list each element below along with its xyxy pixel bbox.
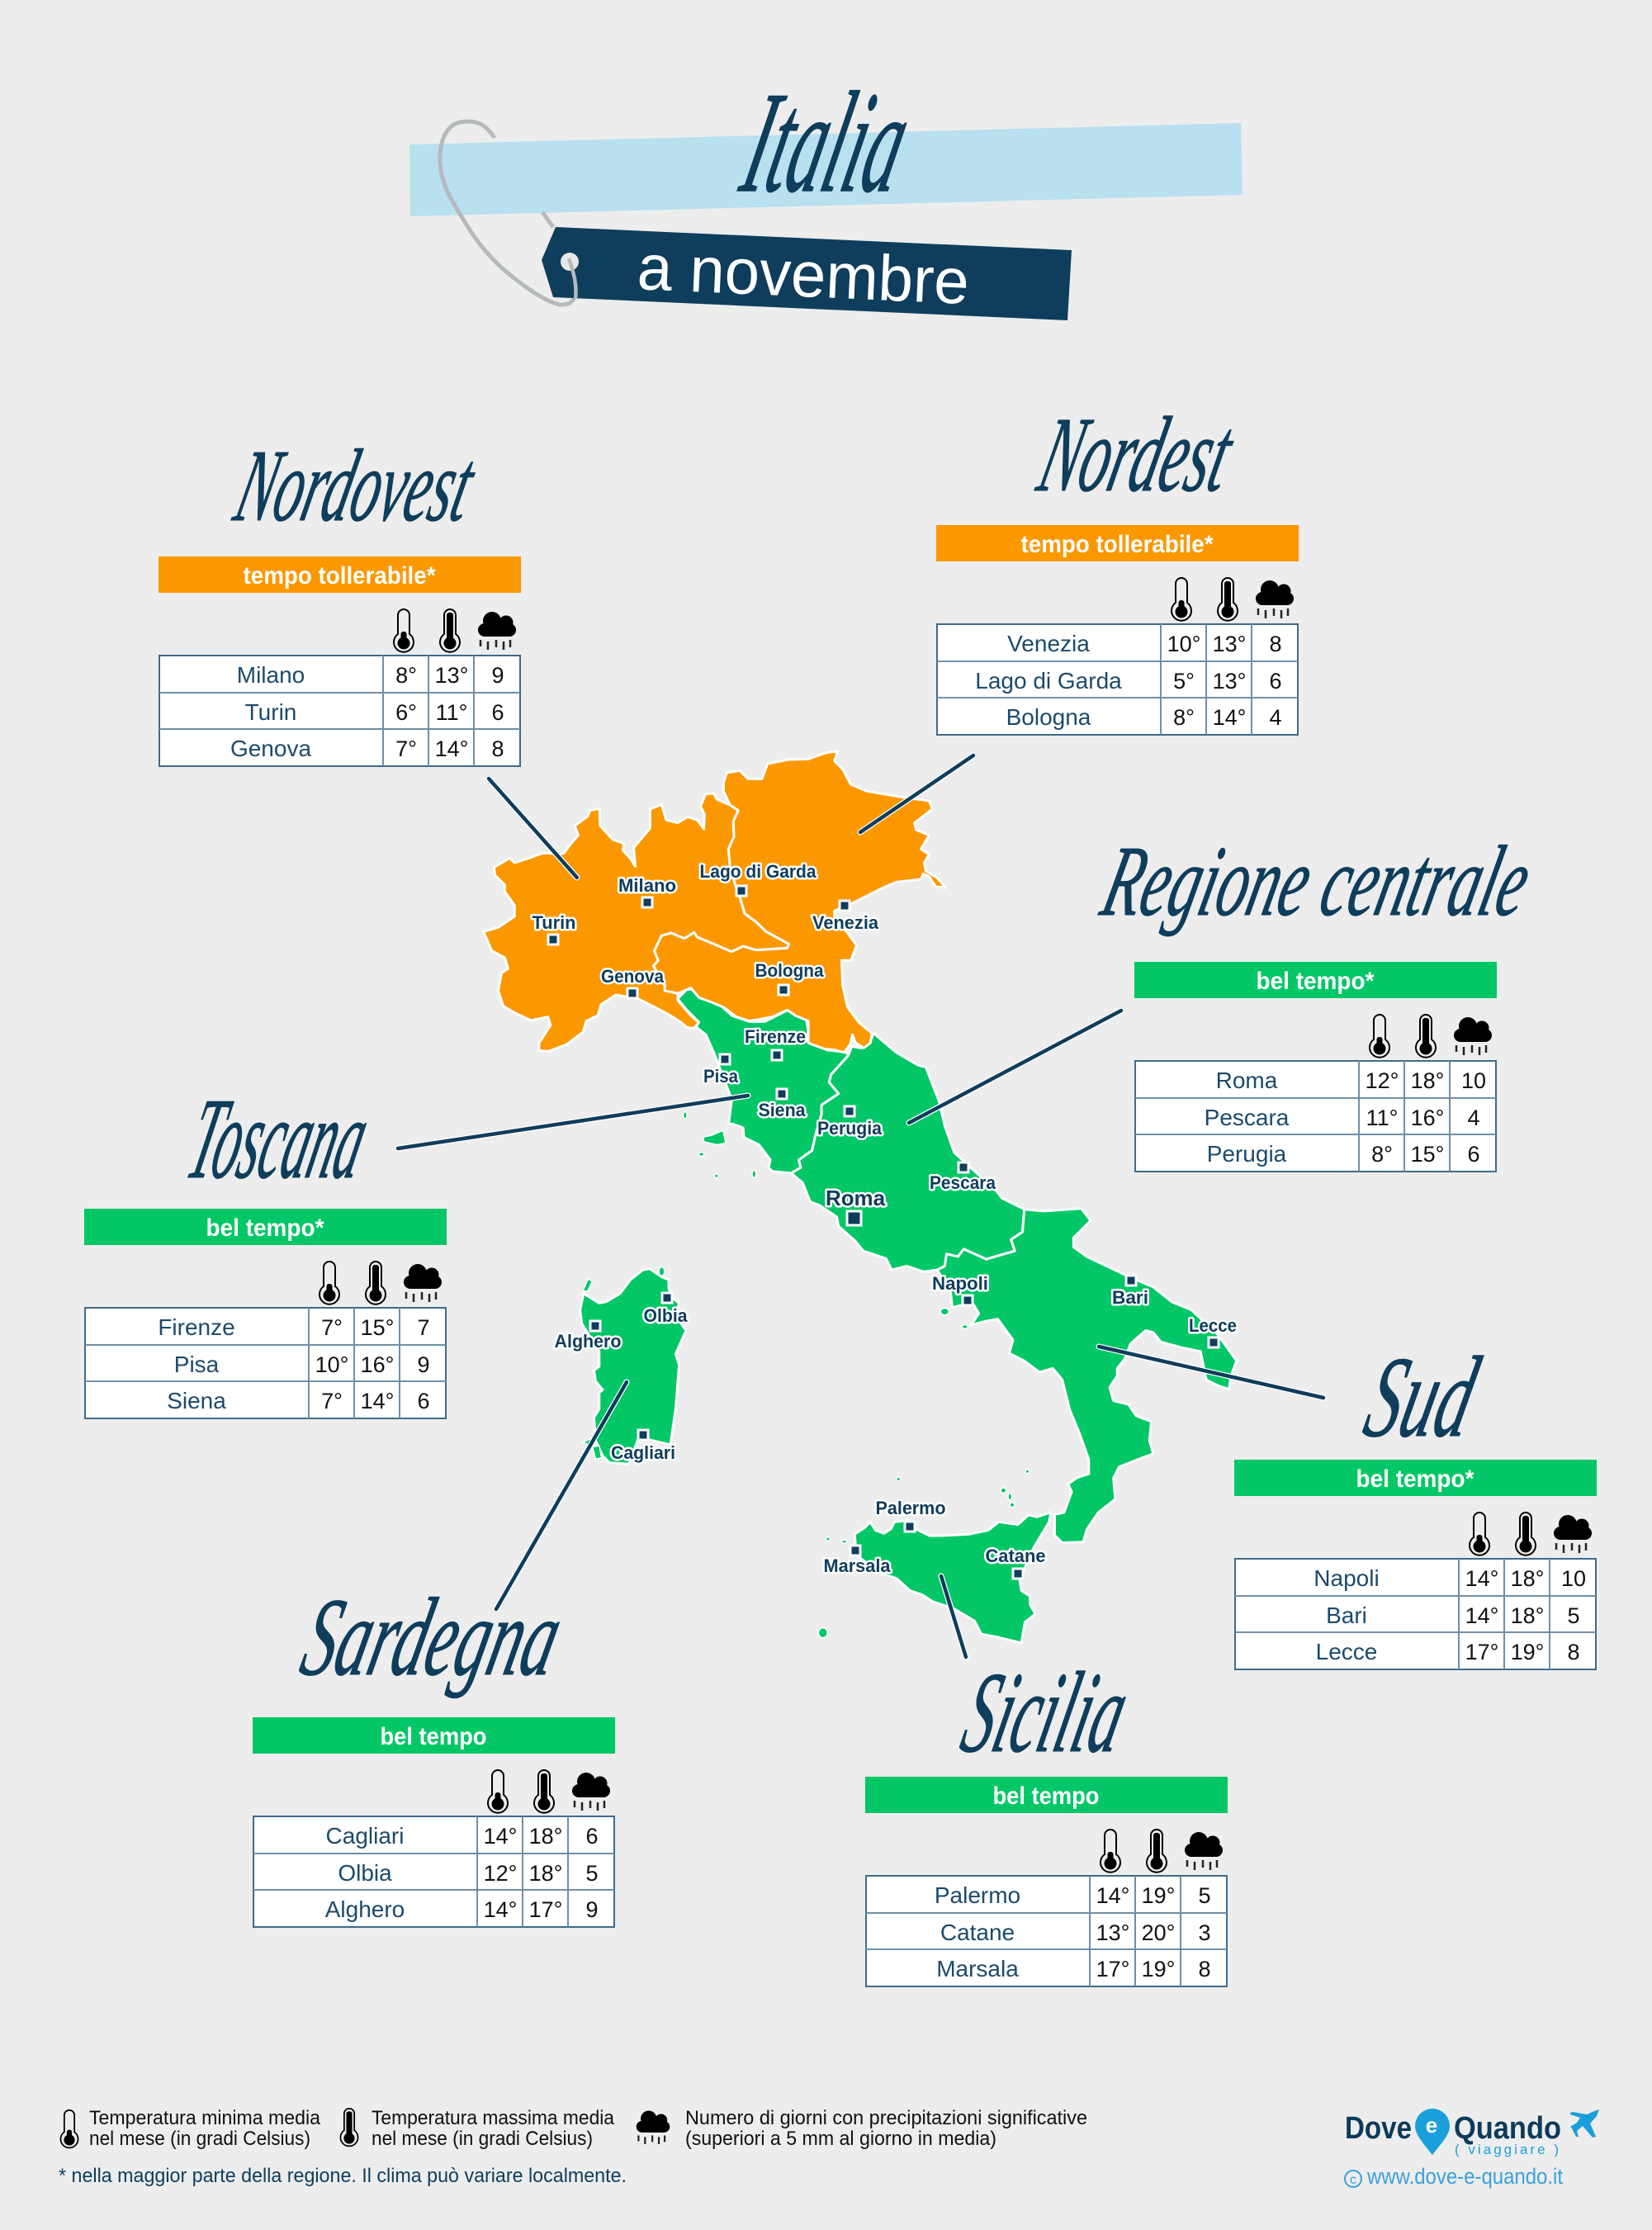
city: Pescara <box>930 1162 996 1193</box>
panel: Toscana <box>84 1074 447 1418</box>
data table: 8° <box>395 663 417 688</box>
rating bar <box>253 1717 615 1754</box>
data table: 11° <box>1366 1106 1398 1130</box>
data table: 13° <box>435 663 468 688</box>
logo wordmark: Dove: Dove <box>1345 2111 1412 2146</box>
rating bar: bel tempo* <box>1356 1465 1474 1493</box>
data table: Lago di Garda <box>975 668 1122 694</box>
data table: 14° <box>1096 1883 1129 1908</box>
data table: 19° <box>1142 1957 1175 1981</box>
title band <box>409 123 1243 216</box>
city: Pisa: Pisa <box>703 1066 739 1087</box>
data table: 18° <box>1511 1603 1544 1628</box>
data table: 18° <box>529 1861 562 1886</box>
region: Tuscany <box>678 989 848 1178</box>
rating and data <box>84 1209 447 1418</box>
region: north-west <box>484 793 788 1051</box>
data table <box>159 656 520 766</box>
region: north-east <box>653 751 945 1053</box>
data table: Venezia <box>1007 631 1090 656</box>
legend: minimum temperature <box>60 2107 321 2150</box>
city: Venezia <box>812 901 879 933</box>
data table: 4 <box>1269 705 1282 730</box>
city: Napoli: Napoli <box>932 1273 988 1294</box>
legend: maximum temperature: Temperatura massima media <box>372 2107 615 2129</box>
heading: Toscana <box>177 1074 381 1202</box>
data table: 6° <box>395 700 417 725</box>
city: Pisa <box>703 1054 739 1087</box>
data table: 6 <box>1467 1142 1480 1167</box>
data table: 7 <box>417 1315 430 1340</box>
legend <box>59 2107 1087 2187</box>
leader line: Sicilia <box>941 1576 966 1657</box>
data table: Napoli <box>1314 1565 1380 1591</box>
rating bar: bel tempo* <box>206 1214 324 1242</box>
data table: 8 <box>1198 1957 1211 1981</box>
icons <box>1101 1830 1223 1873</box>
rating and data <box>159 556 521 766</box>
data table: 3 <box>1198 1920 1211 1945</box>
icons <box>1470 1513 1592 1555</box>
city: Milano <box>618 875 676 907</box>
logo tagline: ( viaggiare ) <box>1455 2142 1559 2157</box>
rating bar: tempo tollerabile* <box>243 562 436 589</box>
city: Perugia: Perugia <box>817 1118 883 1139</box>
data table: Bari <box>1326 1603 1367 1628</box>
city: Olbia: Olbia <box>644 1305 688 1326</box>
data table: 10° <box>1167 632 1200 656</box>
city: Catane: Catane <box>986 1546 1045 1566</box>
logo pin: e <box>1426 2113 1437 2138</box>
data table: 6 <box>491 700 504 725</box>
city: Cagliari <box>611 1430 675 1463</box>
leader line: Regione centrale <box>909 1011 1121 1123</box>
data table: 9 <box>491 663 504 688</box>
data table: Palermo <box>935 1882 1020 1908</box>
city: Palermo <box>875 1498 946 1532</box>
data table: 17° <box>1096 1957 1129 1981</box>
logo <box>1345 2109 1599 2189</box>
data table: 5° <box>1173 669 1195 694</box>
city: Lago di Garda <box>700 861 817 896</box>
data table: 5 <box>1198 1883 1211 1908</box>
city: Alghero: Alghero <box>555 1331 621 1352</box>
city: Siena: Siena <box>758 1100 806 1120</box>
month tag: a novembre <box>636 230 971 318</box>
region: Sicily <box>818 1513 1051 1643</box>
data table: Perugia <box>1207 1141 1287 1167</box>
legend: minimum temperature: Temperatura minima media <box>89 2107 321 2129</box>
data table: Pescara <box>1205 1105 1290 1130</box>
data table: 10 <box>1561 1566 1586 1591</box>
city: Alghero <box>555 1321 621 1352</box>
data table: 14° <box>484 1897 517 1922</box>
heading: Sud <box>1354 1333 1490 1461</box>
logo wordmark: Quando: Quando <box>1454 2111 1561 2146</box>
copyright and website: c <box>1350 2173 1356 2187</box>
leader line: Sardegna <box>496 1382 627 1609</box>
data table: 16° <box>361 1352 394 1377</box>
city: Siena <box>758 1089 806 1120</box>
data table: Catane <box>940 1920 1015 1945</box>
panel: Sardegna <box>253 1576 615 1927</box>
city: Milano: Milano <box>618 875 676 896</box>
rating bar: bel tempo* <box>1257 968 1375 995</box>
data table: 7° <box>321 1315 343 1340</box>
legend: minimum temperature: nel mese (in gradi Celsius) <box>89 2128 310 2150</box>
region: centre <box>791 1033 1025 1271</box>
data table: 15° <box>1411 1142 1444 1167</box>
city: Marsala: Marsala <box>824 1555 891 1576</box>
data table: 18° <box>1411 1068 1444 1093</box>
heading: Nordest <box>1028 395 1246 514</box>
panel: Sud <box>1234 1333 1597 1669</box>
data table: 16° <box>1411 1106 1444 1130</box>
data table: 10 <box>1461 1068 1486 1093</box>
data table: 8 <box>1269 632 1282 656</box>
data table: 15° <box>361 1315 394 1340</box>
city: Napoli <box>932 1273 988 1305</box>
data table: 10° <box>315 1352 348 1377</box>
data table: 14° <box>1465 1603 1498 1628</box>
data table: 19° <box>1511 1640 1544 1664</box>
data table: 9 <box>417 1352 430 1377</box>
city: Lecce: Lecce <box>1189 1315 1237 1336</box>
data table: 14° <box>1213 705 1246 730</box>
city: Pescara: Pescara <box>930 1172 996 1193</box>
city: Lecce <box>1189 1315 1237 1347</box>
city: Bologna <box>755 960 824 995</box>
data table: 18° <box>1511 1566 1544 1591</box>
data table: 4 <box>1467 1106 1480 1130</box>
rating bar <box>936 525 1299 561</box>
data table: 8° <box>1371 1142 1393 1167</box>
title block <box>409 62 1243 320</box>
icons <box>1172 578 1294 621</box>
data table: 5 <box>585 1861 599 1886</box>
data table: 11° <box>436 700 467 725</box>
panel: Sicilia <box>865 1648 1228 1986</box>
data table: 17° <box>1465 1640 1498 1664</box>
city: Bologna: Bologna <box>755 960 824 981</box>
data table: 5 <box>1567 1603 1580 1628</box>
data table: Genova <box>230 736 311 761</box>
data table <box>1235 1559 1596 1669</box>
city: Palermo: Palermo <box>875 1498 946 1518</box>
city: Lago di Garda: Lago di Garda <box>700 861 817 882</box>
region: south <box>826 1209 1237 1543</box>
rating bar: tempo tollerabile* <box>1020 531 1214 558</box>
data table: 14° <box>361 1389 394 1413</box>
region: Sardinia <box>580 1267 686 1464</box>
city: Firenze: Firenze <box>745 1026 806 1047</box>
icons <box>488 1770 610 1813</box>
rating bar <box>1234 1460 1597 1496</box>
city: Firenze <box>745 1026 806 1060</box>
data table: 9 <box>585 1897 599 1922</box>
rating bar <box>159 556 521 593</box>
rating and data <box>253 1717 615 1927</box>
data table: Milano <box>237 662 305 688</box>
city: Turin <box>532 912 576 945</box>
leader line: Sud <box>1099 1347 1323 1398</box>
month tag <box>542 227 1072 320</box>
icon: plane <box>1570 2109 1599 2138</box>
leader line: Nordest <box>860 755 973 832</box>
data table: 14° <box>484 1824 517 1849</box>
rating bar <box>84 1209 447 1245</box>
data table: 20° <box>1142 1920 1175 1945</box>
legend: maximum temperature: nel mese (in gradi Celsius) <box>372 2128 593 2150</box>
rating and data <box>865 1777 1228 1986</box>
city: Turin: Turin <box>532 912 576 933</box>
leader line: Nordovest <box>489 779 577 878</box>
icons <box>1370 1015 1492 1058</box>
legend: rainy days <box>637 2107 1087 2150</box>
rating bar <box>865 1777 1228 1813</box>
city: Marsala <box>824 1546 891 1576</box>
map of Italy <box>398 751 1323 1657</box>
data table: 8° <box>1173 705 1195 730</box>
data table: Bologna <box>1006 704 1091 730</box>
data table: 6 <box>417 1389 430 1413</box>
data table <box>85 1308 446 1418</box>
data table: 8 <box>1567 1640 1580 1664</box>
icons <box>394 609 516 652</box>
rating bar: bel tempo <box>380 1723 487 1750</box>
data table: 12° <box>484 1861 517 1886</box>
data table: Olbia <box>338 1860 392 1886</box>
data table: 14° <box>1465 1566 1498 1591</box>
logo pin <box>1415 2109 1450 2155</box>
data table <box>937 624 1298 735</box>
data table <box>253 1816 614 1927</box>
data table: 8 <box>491 736 504 761</box>
data table: Alghero <box>325 1896 405 1922</box>
city: Cagliari: Cagliari <box>611 1442 675 1463</box>
panel: Nordest <box>936 395 1299 735</box>
city: Bari: Bari <box>1112 1287 1148 1308</box>
data table: Firenze <box>158 1314 235 1340</box>
rating bar: bel tempo <box>992 1783 1100 1810</box>
city: Perugia <box>817 1106 883 1139</box>
rating and data <box>936 525 1299 735</box>
leader line: Toscana <box>398 1096 748 1148</box>
city: Olbia <box>644 1293 688 1326</box>
legend: rainy days: Numero di giorni con precipitazioni significative <box>685 2107 1087 2129</box>
city: Catane <box>986 1546 1045 1579</box>
data table <box>1135 1061 1496 1172</box>
icons <box>320 1262 442 1304</box>
data table: Roma <box>1216 1068 1278 1093</box>
legend: maximum temperature <box>340 2107 615 2150</box>
city: Roma: Roma <box>826 1186 886 1210</box>
data table: Pisa <box>174 1352 220 1377</box>
rating and data <box>1234 1460 1597 1669</box>
data table: 7° <box>395 736 417 761</box>
footnote: * nella maggior parte della regione. Il clima può variare localmente. <box>59 2165 627 2187</box>
data table: 19° <box>1142 1883 1175 1908</box>
copyright and website: www.dove-e-quando.it <box>1366 2164 1563 2189</box>
data table: Siena <box>167 1388 226 1413</box>
data table: 12° <box>1366 1068 1399 1093</box>
data table: Lecce <box>1316 1639 1377 1664</box>
data table: 18° <box>529 1824 562 1849</box>
data table: Cagliari <box>326 1823 404 1849</box>
rating and data <box>1134 962 1497 1172</box>
city: Genova <box>601 966 665 998</box>
data table: Marsala <box>936 1956 1019 1981</box>
data table: 7° <box>321 1389 343 1413</box>
data table: Turin <box>245 699 296 725</box>
data table <box>866 1876 1227 1986</box>
legend: rainy days: (superiori a 5 mm al giorno in media) <box>685 2128 996 2150</box>
data table: 6 <box>585 1824 599 1849</box>
panel: Nordovest <box>159 428 521 766</box>
city: Bari <box>1112 1276 1148 1308</box>
city: Venezia: Venezia <box>812 912 879 933</box>
heading: Sicilia <box>951 1648 1140 1776</box>
title: Italia: Italia <box>729 62 925 222</box>
data table: 13° <box>1096 1920 1129 1945</box>
city: Genova: Genova <box>601 966 665 987</box>
tag string <box>440 121 576 305</box>
data table: 6 <box>1269 669 1282 694</box>
data table: 13° <box>1213 632 1246 656</box>
city: Roma <box>826 1186 886 1225</box>
data table: 13° <box>1213 669 1246 694</box>
data table: 17° <box>529 1897 562 1922</box>
rating bar <box>1134 962 1497 998</box>
heading: Sardegna <box>291 1576 574 1699</box>
heading: Nordovest <box>225 428 487 542</box>
data table: 14° <box>435 736 468 761</box>
panel: Regione centrale <box>1092 826 1541 1172</box>
